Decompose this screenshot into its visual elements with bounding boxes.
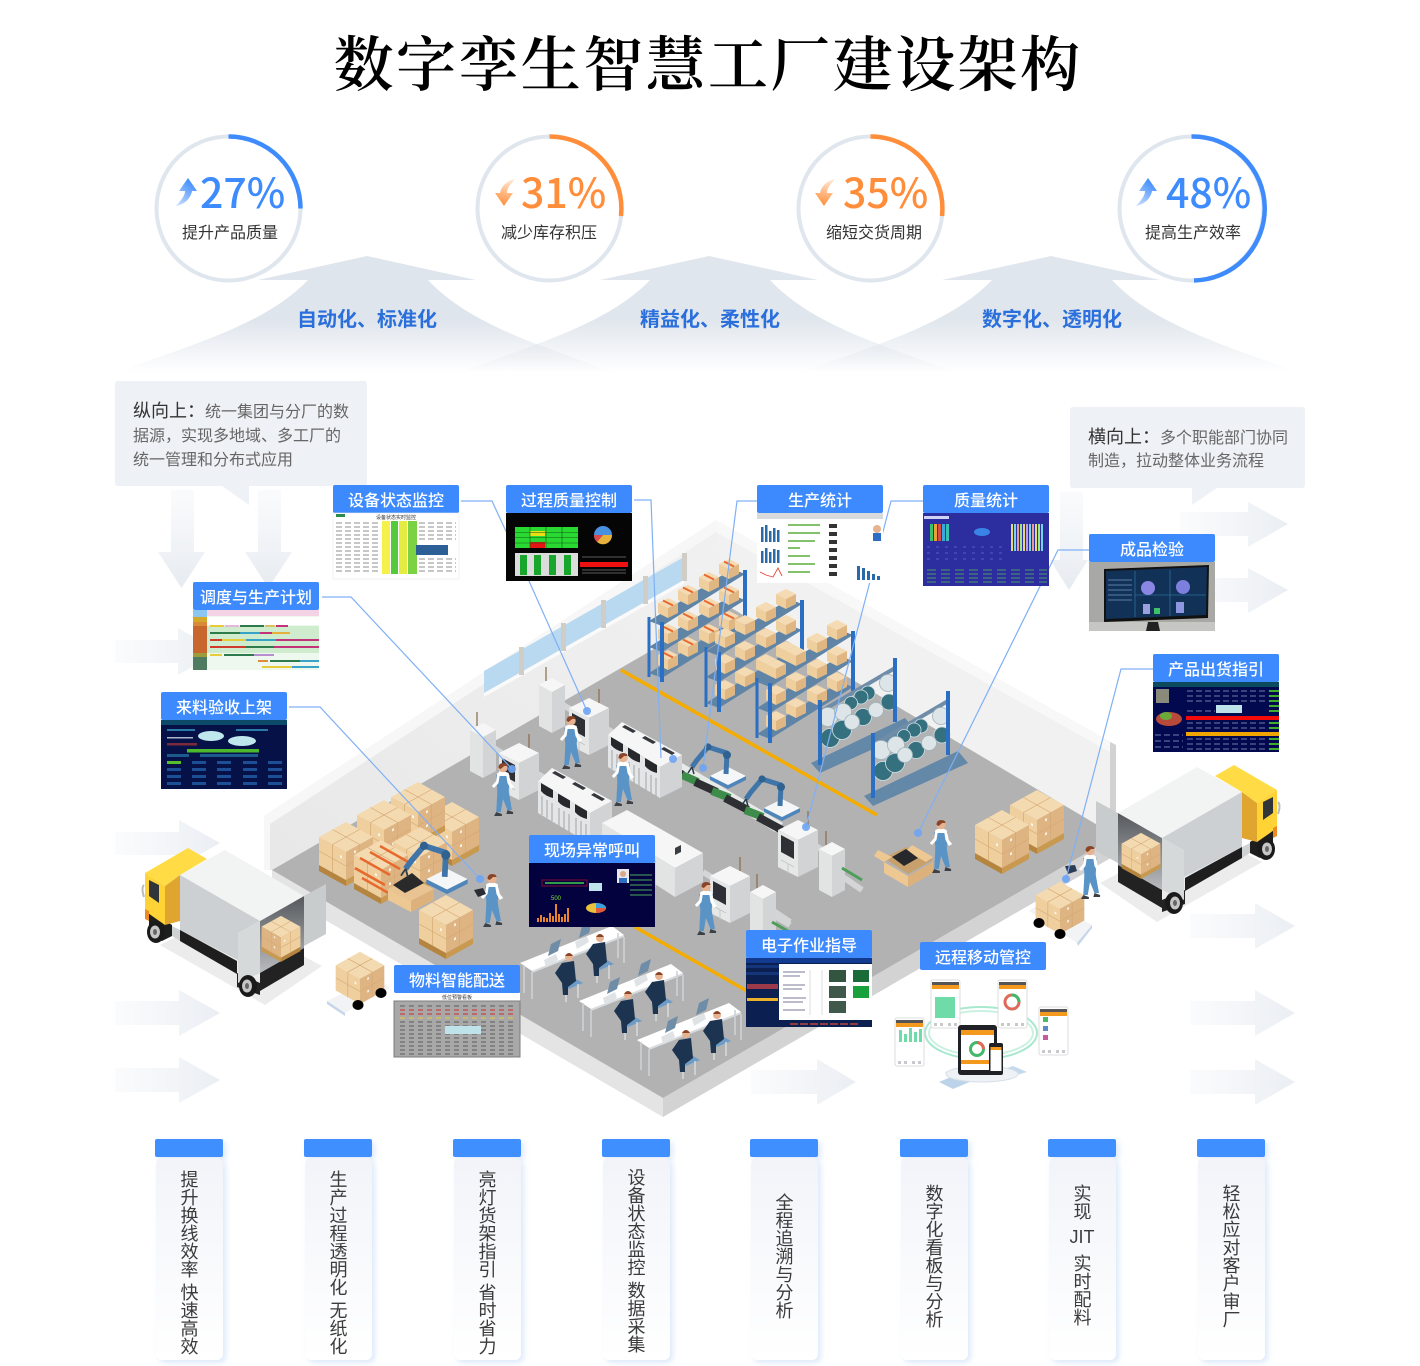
bottom card: dashboards [900, 1139, 968, 1360]
arrow label: digital: 数字化、透明化 [982, 307, 1122, 331]
bottom card: transparency: 生产过程透明化 无纸化 [328, 1170, 348, 1355]
leader lines [289, 500, 1153, 883]
robot arms [688, 743, 800, 821]
reel racks [811, 658, 968, 806]
bottom card: JIT: JIT [1070, 1227, 1095, 1247]
callout: vertical integration: 据源，实现多地域、多工厂的 [133, 427, 341, 445]
card: production schedule: 调度与生产计划 [200, 588, 312, 607]
callout: horizontal collaboration [1070, 407, 1305, 505]
metric: 27% quality: 27% [200, 160, 285, 220]
bottom card: audits: 轻松应对客户审厂 [1220, 1184, 1240, 1328]
bottom card: dashboards: 数字化看板与分析 [924, 1184, 944, 1328]
metric: 48% efficiency: 48% [1166, 160, 1251, 220]
card: finished inspection: 成品检验 [1120, 541, 1184, 559]
seated operators at desks [520, 921, 741, 1079]
card: onsite alarm: 500 [551, 896, 562, 902]
callout: vertical integration: 纵向上：统一集团与分厂的数 [133, 401, 349, 421]
metric: 31% inventory [478, 136, 622, 280]
bottom card: changeover [155, 1139, 223, 1360]
card: remote mobile control [895, 942, 1068, 1089]
callout: horizontal collaboration: 横向上：多个职能部门协同 [1088, 427, 1288, 447]
factory floor and walls [264, 520, 1116, 1117]
callout: vertical integration [115, 381, 367, 505]
metric: 35% lead time [798, 136, 942, 280]
card: onsite alarm: 现场异常呼叫 [544, 842, 640, 860]
card: material delivery: 物料智能配送 [409, 972, 505, 990]
card: equipment status: 设备状态实时监控 [376, 514, 416, 521]
card: remote mobile control: 远程移动管控 [935, 948, 1031, 967]
production line machines [470, 667, 862, 940]
card: process quality: 过程质量控制 [521, 492, 617, 510]
metric: 27% quality [156, 136, 300, 280]
card: equipment status: 设备状态监控 [348, 492, 444, 510]
card: material receiving: 来料验收上架 [176, 699, 272, 717]
bottom card: JIT: 实现 [1072, 1184, 1092, 1220]
callout: horizontal collaboration: 制造，拉动整体业务流程 [1088, 452, 1264, 470]
outbound area [874, 790, 1101, 946]
card: shipment guide: 产品出货指引 [1168, 661, 1264, 679]
bottom card: audits [1197, 1139, 1265, 1360]
metric: 35% lead time: 35% [843, 160, 928, 220]
card: quality statistics [923, 485, 1049, 586]
card: production statistics: 生产统计 [788, 492, 852, 510]
bottom card: monitoring [602, 1139, 670, 1360]
card: electronic work guide: 电子作业指导 [761, 937, 857, 955]
card: onsite alarm [529, 835, 655, 927]
card: shipment guide [1153, 654, 1279, 752]
metric: 27% quality: 提升产品质量 [182, 224, 278, 242]
arrow label: lean: 精益化、柔性化 [640, 308, 780, 331]
bottom card: traceability: 全程追溯与分析 [774, 1193, 794, 1319]
outbound truck [1096, 765, 1280, 922]
bottom card: changeover: 提升换线效率 快速高效 [178, 1170, 198, 1355]
bottom card: monitoring: 设备状态监控 数据采集 [626, 1168, 646, 1353]
card: quality statistics: 质量统计 [954, 492, 1018, 510]
inbound truck [142, 848, 326, 1005]
title: 数字孪生智慧工厂建设架构 [334, 18, 1082, 104]
bottom card: JIT: 实时配料 [1072, 1254, 1092, 1326]
card: production schedule [193, 582, 319, 670]
bottom card: pick to light: 亮灯货架指引 省时省力 [476, 1170, 496, 1355]
card: equipment status [333, 485, 459, 579]
card: material receiving [161, 692, 287, 789]
bottom card: transparency [304, 1139, 372, 1360]
bottom card: pick to light [453, 1139, 521, 1360]
large up arrows [118, 256, 1297, 372]
metric: 48% efficiency [1120, 136, 1265, 280]
metric: 35% lead time: 缩短交货周期 [826, 224, 922, 242]
delivery trolley [327, 952, 390, 1016]
storage shelves [649, 559, 853, 743]
card: process quality [506, 485, 632, 581]
card: material delivery: 低位预警看板 [442, 994, 472, 1001]
card: electronic work guide [746, 930, 872, 1027]
card: production statistics [757, 485, 883, 583]
bottom card: traceability [750, 1139, 818, 1360]
card: finished inspection [1089, 534, 1215, 631]
faded background arrows [115, 490, 1295, 1105]
metric: 31% inventory: 减少库存积压 [501, 224, 597, 242]
inbound pallets and robot [319, 782, 503, 959]
card: material delivery [394, 965, 520, 1057]
callout: vertical integration: 统一管理和分布式应用 [133, 450, 293, 469]
metric: 31% inventory: 31% [521, 160, 606, 220]
bottom card: JIT [1048, 1139, 1116, 1360]
metric: 48% efficiency: 提高生产效率 [1145, 224, 1241, 242]
arrow label: automation: 自动化、标准化 [297, 308, 437, 331]
line workers [492, 716, 717, 935]
